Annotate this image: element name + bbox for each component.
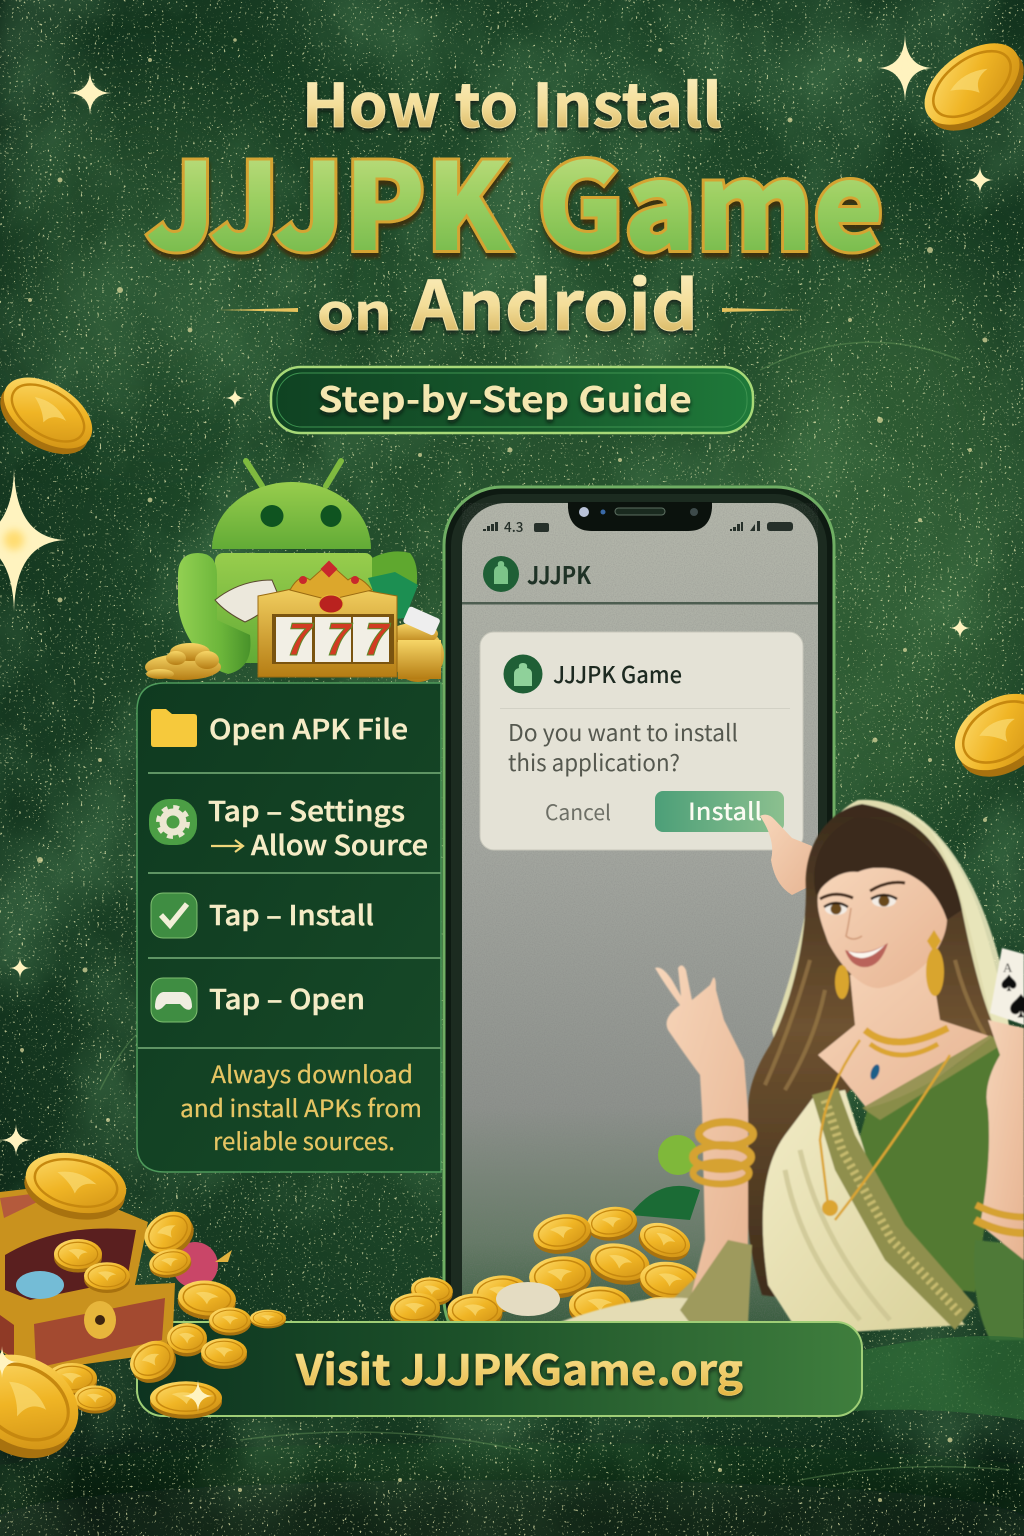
safety note bbox=[180, 1055, 422, 1157]
veil front bbox=[895, 805, 1010, 1035]
chest front bbox=[34, 1298, 165, 1368]
step 2: settings: Tap – Settings bbox=[208, 790, 405, 829]
nose and mouth bbox=[845, 908, 888, 967]
veil back bbox=[772, 800, 1015, 1070]
earrings bbox=[835, 930, 944, 999]
sari lower band bbox=[640, 1250, 750, 1335]
status bar left bbox=[483, 516, 549, 536]
corner sparkle bbox=[0, 1346, 18, 1378]
sparkles bbox=[0, 34, 994, 1156]
safety note: Always download bbox=[211, 1055, 413, 1090]
woman bbox=[560, 800, 1024, 1340]
dialog message: this application? bbox=[508, 744, 680, 778]
icon: check bbox=[151, 893, 197, 938]
floating coin right bbox=[941, 678, 1024, 792]
install button: Install bbox=[688, 792, 762, 827]
app header bbox=[483, 556, 591, 592]
necklaces bbox=[820, 1028, 950, 1220]
sari drape bbox=[763, 1090, 965, 1335]
status bar left: 4.3 bbox=[504, 516, 523, 536]
step 3: install: Tap – Install bbox=[209, 894, 374, 933]
sari border bbox=[812, 1088, 975, 1330]
bottom banner bbox=[137, 1322, 862, 1416]
green orb behind coins bbox=[630, 1135, 700, 1220]
playing card: ♠ bbox=[1000, 970, 1018, 996]
step 2: settings bbox=[149, 790, 428, 863]
step 4: open: Tap – Open bbox=[209, 978, 365, 1017]
coin on banner edge bbox=[150, 1380, 222, 1419]
camera and speaker bbox=[579, 507, 698, 517]
playing card bbox=[990, 948, 1024, 1025]
bangles bbox=[693, 1122, 753, 1184]
app header: JJJPK bbox=[527, 556, 591, 591]
chest lock bbox=[84, 1301, 116, 1339]
face bbox=[818, 868, 947, 988]
large coin bottom left bbox=[0, 1336, 96, 1477]
playing cards bbox=[215, 580, 277, 622]
reels: 7 bbox=[321, 604, 353, 668]
sleeve left bbox=[680, 1240, 752, 1336]
safety note: and install APKs from bbox=[180, 1089, 422, 1124]
step 4: open bbox=[151, 978, 365, 1022]
hair highlights bbox=[765, 960, 985, 1090]
install dialog bbox=[480, 632, 803, 850]
dialog message: Do you want to install bbox=[508, 714, 738, 748]
android robot bbox=[178, 461, 417, 674]
green wave behind banner bbox=[840, 1336, 1024, 1420]
coin pile at phone base bbox=[389, 1204, 702, 1330]
reels: 7 bbox=[282, 604, 314, 668]
hair bbox=[746, 804, 1005, 1300]
icon: gamepad bbox=[151, 978, 197, 1022]
subtitle pill bbox=[271, 367, 753, 433]
title: on Android: on bbox=[317, 273, 392, 345]
coin pile right bbox=[390, 623, 444, 682]
install button bbox=[655, 791, 784, 832]
android mascot with slot machine bbox=[145, 461, 444, 682]
reels: 7 bbox=[359, 604, 391, 668]
title: JJJPK Game: JJJPK Game bbox=[146, 111, 884, 285]
title flourish lines bbox=[218, 308, 803, 312]
light streaks bbox=[100, 342, 1010, 1480]
ribbon and card bbox=[368, 572, 441, 636]
coins around chest bbox=[19, 1144, 286, 1414]
sari folds bbox=[785, 1150, 890, 1320]
phone bbox=[444, 487, 834, 1357]
step 1: open APK file: Open APK File bbox=[209, 708, 408, 747]
coin pile left bbox=[145, 643, 221, 680]
floating coin top right bbox=[910, 27, 1024, 147]
step 2: settings: Allow Source bbox=[251, 824, 428, 863]
step 3: install bbox=[151, 893, 374, 938]
subtitle text: Step-by-Step Guide bbox=[318, 372, 692, 423]
floating coin left bbox=[0, 363, 105, 469]
dialog message bbox=[508, 714, 738, 778]
pointing hand bbox=[760, 815, 822, 895]
icon: folder bbox=[151, 709, 197, 747]
right bracelets bbox=[975, 1205, 1024, 1233]
pendants bbox=[822, 1063, 881, 1216]
title: How to Install: How to Install bbox=[302, 58, 722, 145]
dialog header: JJJPK Game bbox=[553, 656, 682, 690]
sleeve right bbox=[974, 1240, 1024, 1340]
banner text: Visit JJJPKGame.org bbox=[295, 1337, 743, 1398]
raised hand bbox=[655, 965, 748, 1300]
icon: gear bbox=[149, 799, 197, 845]
chest gems bbox=[16, 1271, 64, 1299]
slot machine bbox=[258, 561, 397, 677]
reels bbox=[276, 604, 391, 668]
playing card: A bbox=[1003, 960, 1013, 975]
right hand and arm bbox=[980, 1020, 1024, 1260]
steps panel bbox=[137, 683, 441, 1172]
gem ornament bbox=[172, 1242, 232, 1288]
phone notch bbox=[568, 502, 712, 531]
status bar right bbox=[730, 521, 793, 531]
front hair bbox=[814, 818, 962, 920]
safety note: reliable sources. bbox=[213, 1122, 395, 1157]
neck and chest bbox=[818, 955, 992, 1110]
treasure chest bbox=[0, 1185, 175, 1372]
brows and eyes bbox=[820, 882, 905, 915]
blouse bbox=[850, 1035, 1024, 1292]
cancel button: Cancel bbox=[545, 797, 611, 827]
dialog header bbox=[504, 654, 682, 694]
title: on Android: Android bbox=[410, 251, 698, 350]
